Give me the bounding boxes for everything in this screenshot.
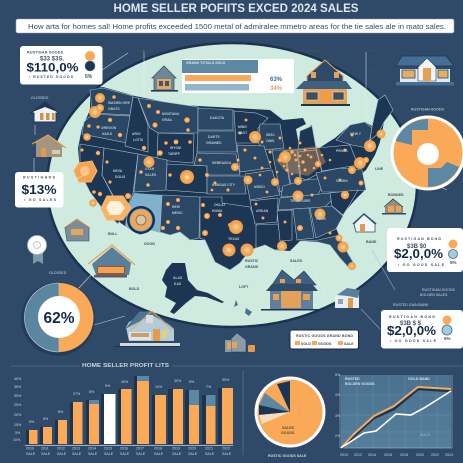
state labels: NEW — [172, 205, 181, 209]
large hexagon markers — [74, 161, 131, 220]
map callout labels: GLOSSED — [31, 96, 49, 100]
state labels: NEW Y — [350, 132, 362, 136]
x labels: 2020 — [188, 446, 196, 450]
map callout labels: LAPS GOOD — [356, 49, 378, 53]
callout card: $110,0%: RUSTIGAN GOODS — [27, 50, 64, 54]
map callout labels: BAND — [366, 240, 377, 244]
state labels: KANSAS CITY — [212, 183, 236, 187]
x tick labels: 2020 — [416, 453, 424, 457]
y axis labels — [13, 377, 22, 442]
state labels: MEXIC — [172, 211, 183, 215]
x tick labels: 2024 — [445, 453, 453, 457]
chart labels: 3% — [335, 414, 341, 418]
donut: 62%: 62% — [43, 310, 75, 327]
state labels: UTAH — [145, 167, 155, 171]
house: navy roof left — [30, 102, 60, 122]
x labels: 2021 — [205, 446, 213, 450]
x labels: SALE — [205, 452, 215, 456]
pie chart: GOODS — [281, 431, 295, 435]
x labels: 2015 — [104, 446, 112, 450]
y axis labels: 30% — [14, 394, 22, 398]
callout card: $110,0%: $33 $3S. — [40, 56, 64, 62]
map callout labels: GRAND — [137, 49, 151, 53]
callout card: $2,0,0% lower: 5% — [444, 336, 451, 341]
state labels: PENNS — [336, 149, 348, 153]
state labels: ESOT — [238, 131, 248, 135]
state labels: MINN — [238, 125, 247, 129]
map leader lines — [34, 50, 447, 329]
legend box: GOODS — [318, 342, 332, 346]
state labels: WYOM — [170, 146, 181, 150]
alaska: KAS — [174, 282, 182, 286]
x tick labels: 2018 — [400, 453, 408, 457]
map callout labels: BULL — [108, 232, 118, 236]
US map — [74, 87, 393, 270]
x labels: SALE — [136, 452, 146, 456]
pie caption: RUSTIC GOODS SALE — [268, 454, 307, 458]
state labels: AROI — [132, 132, 141, 136]
callout card: $110,0%: • RUSTED GOODS — [29, 75, 74, 79]
house: garage — [88, 245, 135, 278]
series: white — [341, 391, 451, 448]
x labels: SALE — [88, 452, 98, 456]
x labels: 2013 — [72, 446, 80, 450]
chart labels — [335, 373, 430, 438]
callout card: $2,0,0% upper: • GO GOOD SALE — [398, 263, 445, 267]
callout card: $2,0,0% upper — [387, 228, 463, 272]
state labels: SALES — [145, 173, 157, 177]
state labels: TEXAS — [228, 237, 240, 241]
state labels: DAKOTA — [210, 116, 225, 120]
line chart — [335, 373, 453, 457]
state labels: MISSO — [254, 185, 265, 189]
legend box: RUSTIC GOODS GRAND BOND — [296, 334, 353, 338]
state labels: OREGON — [101, 126, 117, 130]
callout card: $2,0,0% upper: RUSTIGAN BOND — [397, 237, 441, 241]
callout card: $2,0,0% upper: 5% — [450, 260, 457, 265]
map callout labels: SALES — [290, 259, 303, 263]
legend box: SOLD — [301, 342, 311, 346]
western states — [80, 88, 257, 270]
state labels: OBATS — [108, 107, 120, 111]
x labels: 2017 — [136, 446, 144, 450]
bar value labels: 8% — [43, 417, 49, 421]
pie chart: SALES — [282, 426, 295, 430]
house: bottom-left of west coast — [64, 219, 90, 241]
donut: 62% — [21, 282, 95, 356]
x labels: 2022 — [222, 446, 230, 450]
x labels: SALE — [57, 452, 67, 456]
x tick labels: 2016 — [384, 453, 392, 457]
series: shadow — [341, 389, 451, 449]
x labels: SALE — [41, 452, 51, 456]
pie chart — [254, 376, 326, 448]
state labels: DOLIS — [115, 175, 126, 179]
bar shadows — [26, 376, 222, 444]
legend box — [290, 330, 358, 349]
y axis labels: 5% — [15, 431, 21, 435]
alaska: ALAS — [173, 276, 183, 280]
comparison panel — [182, 59, 294, 93]
x labels: SALE — [188, 452, 198, 456]
y axis labels: 35% — [14, 385, 22, 389]
state labels: ARKAN — [256, 209, 269, 213]
callout card: $2,0,0% lower: • GO GOOD SALE — [390, 339, 437, 343]
callout card: $13% — [15, 172, 64, 208]
great lakes orange cluster haze — [276, 146, 326, 176]
map callout labels: GLOSSED — [49, 271, 67, 275]
map dots — [80, 93, 386, 270]
hawaii — [234, 300, 252, 316]
x labels: SALE — [222, 452, 232, 456]
comparison panel: 63% — [270, 77, 283, 83]
right donut chart — [390, 116, 463, 190]
x labels: 2018 — [154, 446, 162, 450]
map callout labels: RUSTIGAN BAND — [293, 49, 324, 53]
state labels: LOTIS — [133, 138, 144, 142]
x tick labels — [340, 453, 453, 457]
y axis labels: 10% — [13, 438, 21, 442]
callout card: $2,0,0% lower: $3B $ $ — [400, 321, 422, 327]
y axis labels: 25% — [14, 403, 22, 407]
state labels: GRAINED — [206, 141, 222, 145]
bar value labels — [29, 378, 230, 424]
map callout labels — [31, 49, 456, 307]
x labels: SALE — [120, 452, 130, 456]
state labels: VIRGIN — [336, 179, 348, 183]
bar chart heading: HOME SELLER PROFIT LITS — [82, 363, 169, 369]
map callout labels: GRAND — [245, 265, 259, 269]
state labels: NEBRASKA — [212, 161, 232, 165]
callout card: $2,0,0% upper: $3B $0 — [407, 244, 427, 250]
map callout labels: BOLD — [129, 287, 140, 291]
bar value labels: 10% — [155, 385, 163, 389]
map callout labels: RUSTIGAN GOODS — [422, 288, 456, 292]
x tick labels: 2010 — [340, 453, 348, 457]
bar value labels: 7% — [206, 385, 212, 389]
x labels: 2011 — [41, 446, 49, 450]
bar value labels: 30% — [222, 378, 230, 382]
x labels: 2012 — [57, 446, 65, 450]
y axis labels: 20% — [14, 413, 22, 417]
state labels: TENNESSEE — [290, 199, 311, 203]
comparison panel: 34% — [270, 86, 283, 92]
bars — [29, 381, 233, 444]
x labels: 2019 — [172, 446, 180, 450]
callout card: $13%: $13% — [22, 183, 56, 197]
bar caps — [89, 376, 216, 406]
house: tan roof left — [32, 135, 66, 157]
series: orange — [341, 387, 451, 448]
bar value labels: 27% — [73, 392, 81, 396]
map background ellipse — [47, 43, 417, 327]
callout card: $110,0%: 5% — [85, 74, 93, 80]
x labels: 2016 — [120, 446, 128, 450]
house: large light bottom — [114, 311, 180, 347]
chart labels: SOLD — [420, 433, 430, 437]
bar value labels: 30% — [174, 379, 182, 383]
x tick labels: 2014 — [368, 453, 376, 457]
callout card: $13%: RUSTIGANS — [23, 176, 56, 180]
state labels: WISC — [266, 133, 275, 137]
house: large right lower map — [261, 270, 321, 310]
house: gabled grey — [151, 66, 178, 92]
y axis labels: 40% — [14, 377, 22, 381]
state labels: MONTANA — [162, 112, 180, 116]
map base silhouette — [78, 87, 393, 270]
house: small blue roof center right — [353, 214, 376, 232]
callout card: $2,0,0% lower: $2,0,0% — [387, 324, 436, 338]
chart labels: 5% — [335, 373, 341, 377]
callout card: $13%: • GO SALES — [24, 198, 57, 202]
house: small white right lower — [335, 288, 360, 308]
x labels: 2010 — [26, 446, 34, 450]
map callout labels: RUSTIC — [245, 259, 259, 263]
house: small right — [382, 199, 406, 214]
chart labels: RUSTED — [345, 377, 360, 381]
map callout labels: GALLE — [370, 68, 383, 72]
x tick labels: 2012 — [354, 453, 362, 457]
bar value labels: 8% — [89, 390, 95, 394]
map callout labels: RUSTED GAIN BANK — [393, 303, 429, 307]
right donut label: RUSTIGAN GOODS — [411, 108, 445, 112]
chart labels: 2% — [335, 434, 341, 438]
plot area — [341, 375, 451, 448]
state labels: GEOR — [316, 217, 327, 221]
comparison panel: GRAND TOTALS SOLD — [186, 61, 226, 65]
state labels — [101, 101, 362, 241]
alaska — [162, 263, 224, 314]
state labels: GRAIL — [162, 118, 173, 122]
map callout labels: BOLDEN SALES — [420, 293, 448, 297]
callout card: $2,0,0% upper: $2,0,0% — [394, 247, 443, 261]
x tick labels: 2022 — [431, 453, 439, 457]
x labels: SALE — [104, 452, 114, 456]
house: bottom center small — [225, 333, 255, 352]
map callout labels: LOFT — [239, 285, 249, 289]
callout card: $110,0% — [20, 46, 102, 84]
callout card: $2,0,0% lower — [381, 310, 463, 348]
icon: medal — [28, 236, 46, 264]
chart labels: 4% — [335, 393, 341, 397]
callout card: $110,0%: $110,0% — [26, 62, 78, 74]
bar value labels: 8% — [189, 380, 195, 384]
house: large orange — [296, 60, 352, 106]
legend box: SALE — [344, 342, 354, 346]
chart labels: BOLDEN GOODS — [345, 382, 375, 386]
map callout labels: LINE — [375, 167, 384, 171]
y axis labels: 15% — [14, 423, 22, 427]
central and eastern states — [234, 95, 393, 269]
state labels: DARTS — [208, 135, 220, 139]
state labels: TARIFF — [168, 152, 180, 156]
map callout labels: BONDED — [388, 193, 404, 197]
x labels: SALE — [172, 452, 182, 456]
callout card: $2,0,0% lower: RUSTIGAN BOND — [389, 315, 435, 319]
x labels: 2014 — [88, 446, 96, 450]
x labels: SALE — [26, 452, 36, 456]
bar value labels: 8% — [29, 420, 35, 424]
bar value labels: 30% — [121, 380, 129, 384]
state labels: ONIS — [266, 139, 275, 143]
subtitle banner: How arta for homes sal! Home profits exceeded 1500 metal of admiralee mmetro areas for the tie sales ale in mato sales. — [28, 22, 446, 31]
state labels: NAILS — [102, 132, 113, 136]
x labels — [26, 446, 232, 456]
title: HOME SELLER POFIITS EXCED 2024 SALES — [114, 1, 358, 15]
subtitle banner — [16, 19, 454, 33]
bar value labels: 9% — [105, 384, 111, 388]
state labels: OKLAT — [214, 203, 226, 207]
chart labels: GOLD BAND — [408, 377, 430, 381]
bar value labels: 6% — [58, 410, 64, 414]
state labels: NEVA — [113, 169, 123, 173]
x labels: SALE — [154, 452, 164, 456]
ring marker — [127, 206, 155, 234]
house: blue roof — [396, 56, 454, 86]
bar chart — [13, 376, 233, 456]
map callout labels: GOOD — [144, 242, 155, 246]
x labels: SALE — [72, 452, 82, 456]
state labels: HOMA — [212, 209, 223, 213]
state labels: WASHIN ORE — [108, 101, 131, 105]
